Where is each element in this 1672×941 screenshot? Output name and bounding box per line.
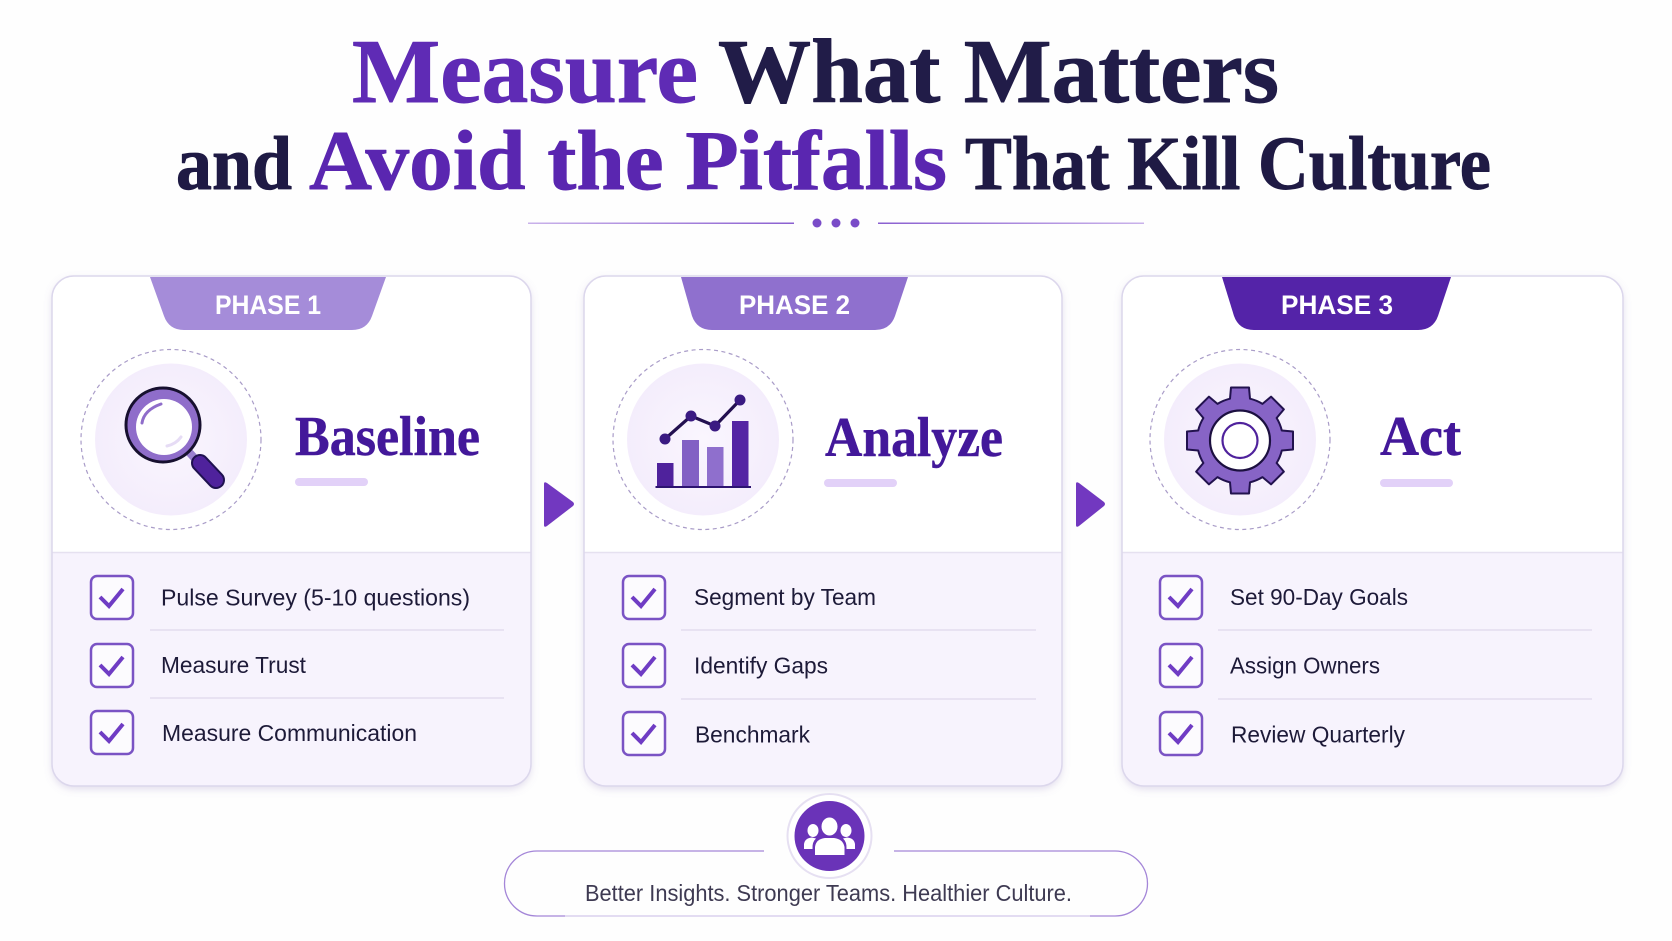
check item: set goals	[1160, 576, 1408, 619]
title line 1	[352, 21, 1279, 122]
title line 2	[176, 114, 1491, 208]
phase 2 tab: PHASE 2	[739, 290, 850, 320]
heading: Act: Act	[1380, 406, 1461, 468]
check item: pulse survey: Pulse Survey (5-10 questions)	[161, 584, 470, 610]
card body	[52, 276, 531, 786]
icon: magnifying glass	[81, 350, 261, 530]
footer banner	[504, 794, 1148, 916]
card body	[584, 276, 1062, 786]
arrow: phase 1 to phase 2	[544, 482, 574, 527]
check item: review quarterly: Review Quarterly	[1231, 722, 1405, 748]
check item: segment by team: Segment by Team	[694, 584, 876, 610]
title	[176, 21, 1491, 208]
icon: bar chart with trend line	[613, 350, 793, 530]
check item: pulse survey	[91, 576, 470, 619]
checklist: phase 3	[1160, 576, 1592, 755]
phase 2 tab	[681, 277, 908, 330]
panel: phase 3 act	[1122, 276, 1623, 786]
check item: assign owners: Assign Owners	[1230, 652, 1380, 678]
heading: Baseline: Baseline	[295, 406, 480, 468]
check item: benchmark: Benchmark	[695, 722, 810, 748]
check item: measure trust	[91, 644, 306, 687]
title divider	[528, 218, 1144, 228]
title line 2: and	[176, 122, 292, 206]
check item: measure communication: Measure Communication	[162, 720, 417, 746]
arrow: phase 2 to phase 3	[1076, 482, 1105, 527]
phase 3 tab	[1222, 277, 1451, 330]
check item: identify gaps	[623, 644, 828, 687]
check item: segment by team	[623, 576, 876, 619]
title line 1: What Matters	[718, 21, 1279, 122]
title line 2: That Kill Culture	[965, 122, 1491, 206]
footer tagline: Better Insights. Stronger Teams. Healthier Culture.	[585, 880, 1072, 906]
check item: set goals: Set 90-Day Goals	[1230, 584, 1408, 610]
icon: gear	[1150, 350, 1330, 530]
check item: benchmark	[623, 712, 810, 755]
check item: measure communication	[91, 711, 417, 754]
checklist: phase 1	[91, 576, 504, 754]
icon: team badge	[788, 794, 872, 878]
footer pill outline	[504, 851, 1148, 916]
check item: review quarterly	[1160, 712, 1405, 755]
phase 3 tab: PHASE 3	[1281, 290, 1393, 320]
phase 1 tab: PHASE 1	[215, 290, 321, 320]
phase 1 tab	[150, 277, 386, 330]
check item: measure trust: Measure Trust	[161, 652, 306, 678]
heading: Analyze: Analyze	[825, 407, 1003, 469]
checklist: phase 2	[623, 576, 1036, 755]
title line 1: Measure	[352, 21, 698, 122]
title line 2: Avoid the Pitfalls	[309, 114, 947, 208]
check item: assign owners	[1160, 644, 1380, 687]
panel: phase 1 baseline	[52, 276, 531, 786]
panel: phase 2 analyze	[584, 276, 1062, 786]
check item: identify gaps: Identify Gaps	[694, 652, 828, 678]
card body	[1122, 276, 1623, 786]
